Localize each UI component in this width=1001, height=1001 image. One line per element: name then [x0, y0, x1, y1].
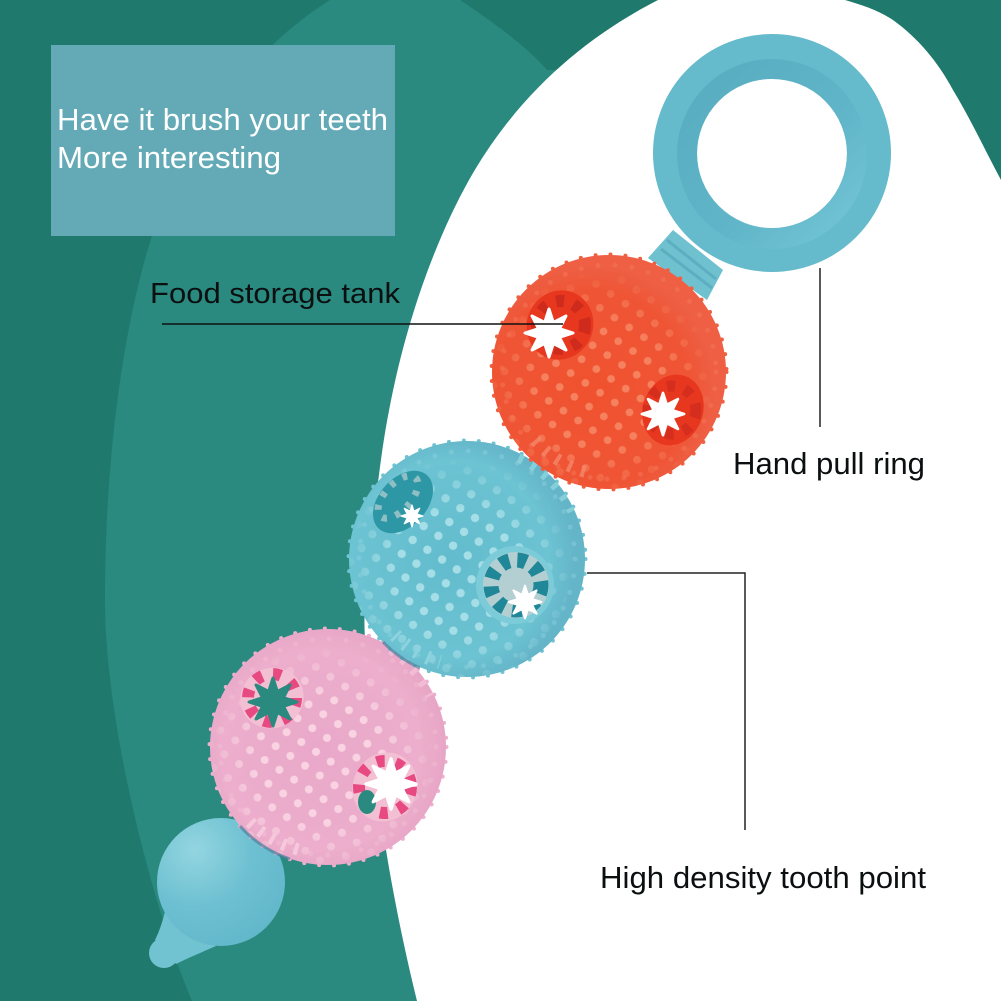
toy: end bulb: [149, 818, 285, 968]
toy: blue ball: [346, 440, 586, 684]
red ball: upper tooth hole: [515, 279, 605, 371]
blue ball: upper tooth hole: [361, 459, 445, 545]
blue ball: lower tooth hole: [476, 546, 554, 624]
background: white curved panel: [364, 0, 1001, 1001]
label: hand pull ring: Hand pull ring: [733, 446, 925, 481]
toy: pull ring: [675, 56, 869, 250]
toy: pink ball: [208, 628, 446, 872]
headline text: Have it brush your teeth: [57, 102, 388, 137]
background: lighter teal arch: [105, 0, 800, 1001]
label: high density tooth point: [587, 573, 926, 895]
sub-headline text: More interesting: [57, 140, 281, 175]
toy: red ball: [488, 254, 726, 497]
label: food storage tank: Food storage tank: [150, 278, 401, 310]
red ball: lower tooth hole: [632, 366, 714, 454]
pink ball: lower tooth hole: [341, 742, 429, 832]
toy: pull ring neck: [648, 230, 723, 300]
label: high density tooth point: High density tooth point: [600, 860, 926, 895]
pink ball: upper tooth hole: [230, 657, 314, 739]
headline panel: [51, 45, 395, 236]
